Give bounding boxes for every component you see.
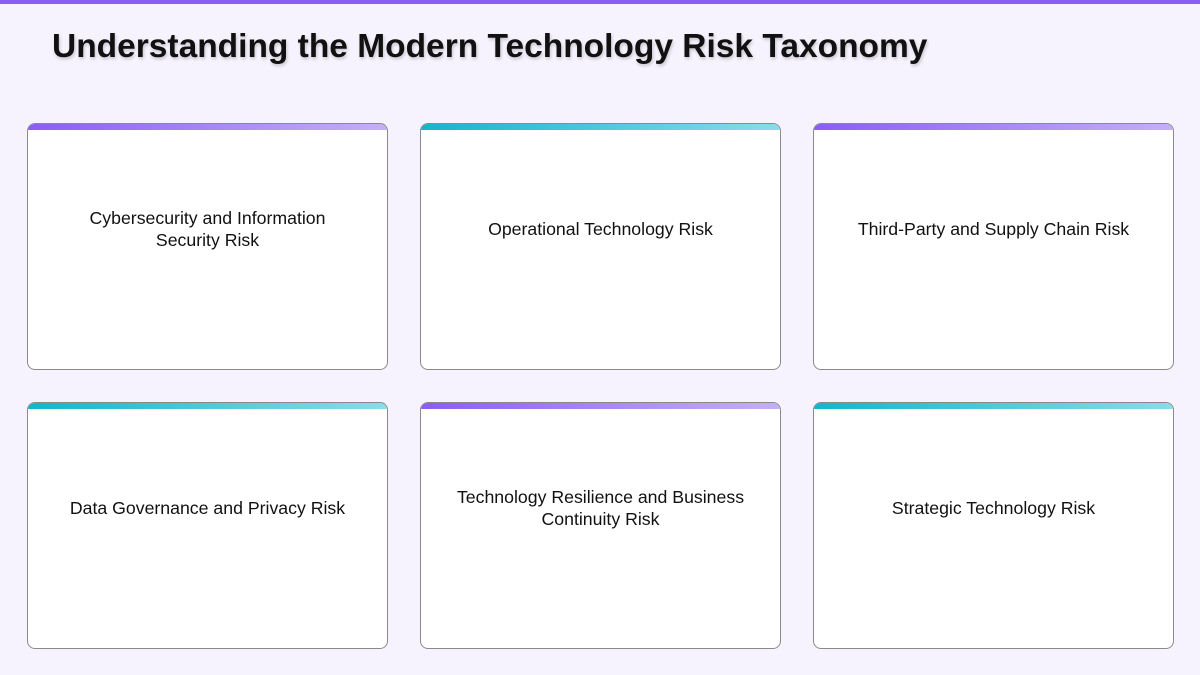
- panel: strategic: Strategic Technology Risk: [892, 498, 1095, 518]
- panel: strategic: [813, 402, 1174, 649]
- panel: operational technology: Operational Technology Risk: [488, 218, 713, 238]
- title: Understanding the Modern Technology Risk Taxonomy: [52, 28, 927, 65]
- panel: cybersecurity: [27, 123, 388, 370]
- panel: resilience: Technology Resilience and Business Continuity Risk: [457, 486, 744, 528]
- panel: third-party: [813, 123, 1174, 370]
- panel: third-party: Third-Party and Supply Chain Risk: [858, 218, 1129, 238]
- panel: operational technology: [420, 123, 781, 370]
- panel: data governance: [27, 402, 388, 649]
- panel: cybersecurity: Cybersecurity and Information Security Risk: [90, 208, 325, 250]
- panel: data governance: Data Governance and Privacy Risk: [70, 498, 345, 518]
- panel: resilience: [420, 402, 781, 649]
